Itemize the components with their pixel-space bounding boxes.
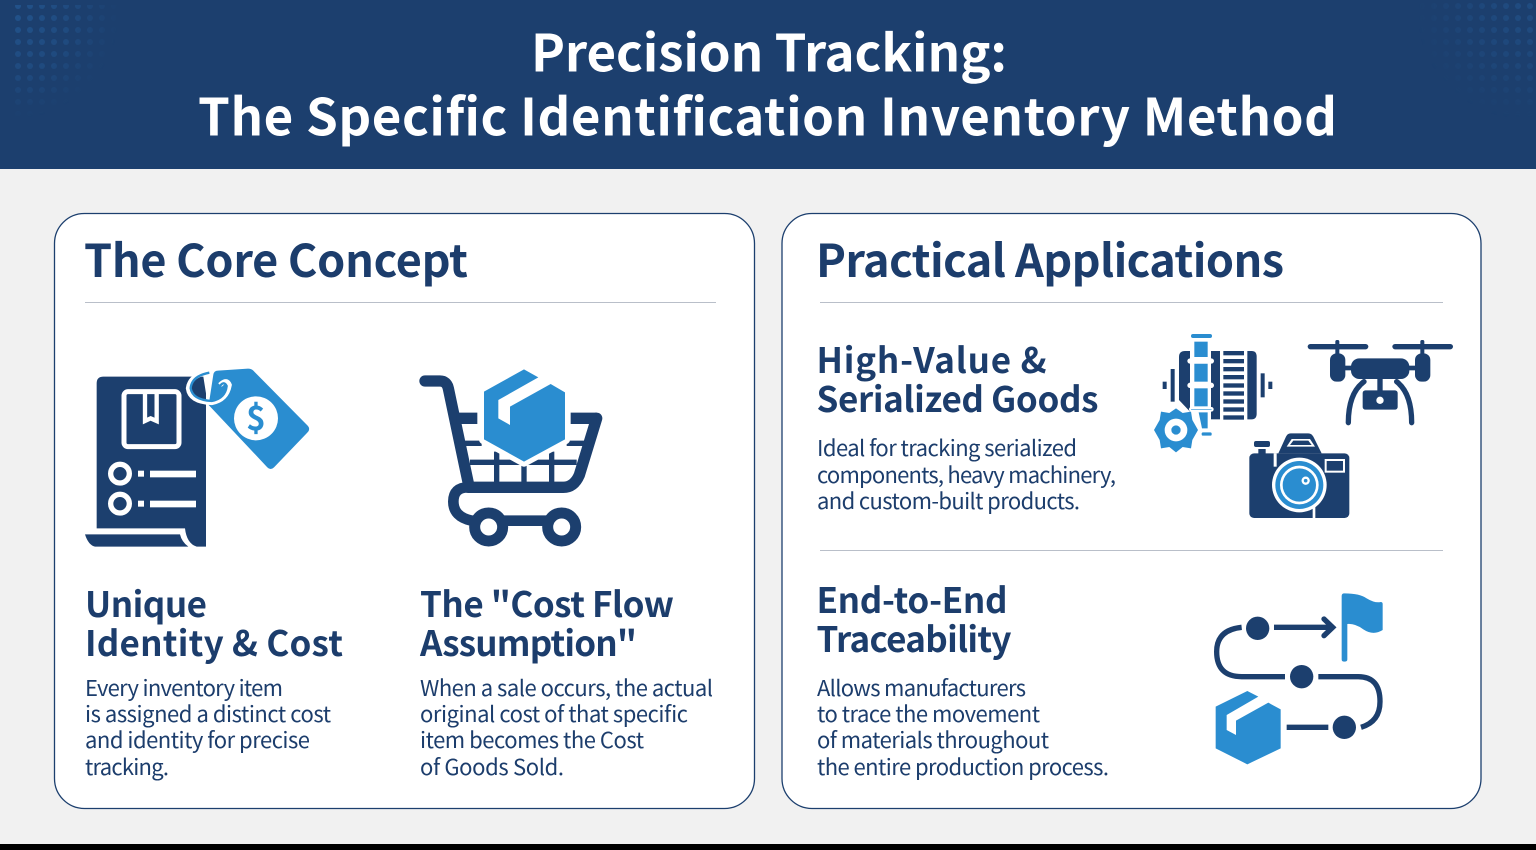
panel: practical applications: [782, 214, 1481, 808]
text block: cost flow assumption: Assumption": [419, 616, 637, 667]
text block: end-to-end traceability: Allows manufacturers: [817, 671, 1026, 703]
text block: unique identity and cost: [85, 577, 343, 782]
text block: end-to-end traceability: the entire production process.: [817, 750, 1109, 782]
text block: end-to-end traceability: of materials throughout: [817, 723, 1049, 755]
text block: unique identity and cost: tracking.: [85, 750, 169, 782]
text block: cost flow assumption: original cost of that specific: [420, 697, 688, 729]
text block: high-value goods: Ideal for tracking serialized: [817, 431, 1077, 463]
icon: drone: [1308, 340, 1453, 423]
icon: traceability route: [1216, 593, 1383, 764]
text block: unique identity and cost: is assigned a distinct cost: [85, 697, 331, 729]
text block: end-to-end traceability: [816, 573, 1109, 782]
title: [198, 12, 1337, 150]
text block: end-to-end traceability: Traceability: [816, 612, 1012, 663]
icon: shopping cart with box: [425, 369, 597, 541]
text block: end-to-end traceability: to trace the movement: [817, 697, 1040, 729]
icon: motor with gear: [1154, 334, 1272, 452]
text block: high-value goods: components, heavy machinery,: [817, 458, 1116, 490]
text block: high-value goods: Serialized Goods: [816, 372, 1098, 423]
title: The Specific Identification Inventory Method: [198, 76, 1337, 150]
title: Precision Tracking:: [531, 12, 1007, 86]
icon: document with price tag: $: [246, 391, 266, 440]
text block: high-value goods: and custom-built products.: [817, 484, 1080, 516]
text block: cost flow assumption: The "Cost Flow: [420, 577, 674, 628]
text block: cost flow assumption: [419, 577, 713, 782]
text block: unique identity and cost: Unique: [85, 577, 207, 628]
text block: end-to-end traceability: End-to-End: [816, 573, 1008, 624]
text block: cost flow assumption: When a sale occurs, the actual: [420, 671, 713, 703]
text block: unique identity and cost: Every inventory item: [85, 671, 283, 703]
text block: cost flow assumption: of Goods Sold.: [420, 750, 564, 782]
text block: high-value goods: [816, 333, 1116, 516]
panel: the core concept: [54, 214, 754, 808]
heading: the core concept: The Core Concept: [84, 225, 468, 290]
text block: unique identity and cost: Identity & Cost: [85, 616, 343, 667]
text block: cost flow assumption: item becomes the Cost: [420, 723, 644, 755]
text block: high-value goods: High-Value &: [816, 333, 1047, 384]
icon: document with price tag: [85, 369, 309, 547]
icon: camera: [1249, 433, 1349, 518]
bottom black bar: [0, 844, 1536, 850]
header banner: [0, 0, 1536, 169]
heading: practical applications: Practical Applications: [816, 225, 1284, 290]
icons: motor, drone and camera: [1154, 334, 1453, 518]
text block: unique identity and cost: and identity for precise: [85, 723, 310, 755]
